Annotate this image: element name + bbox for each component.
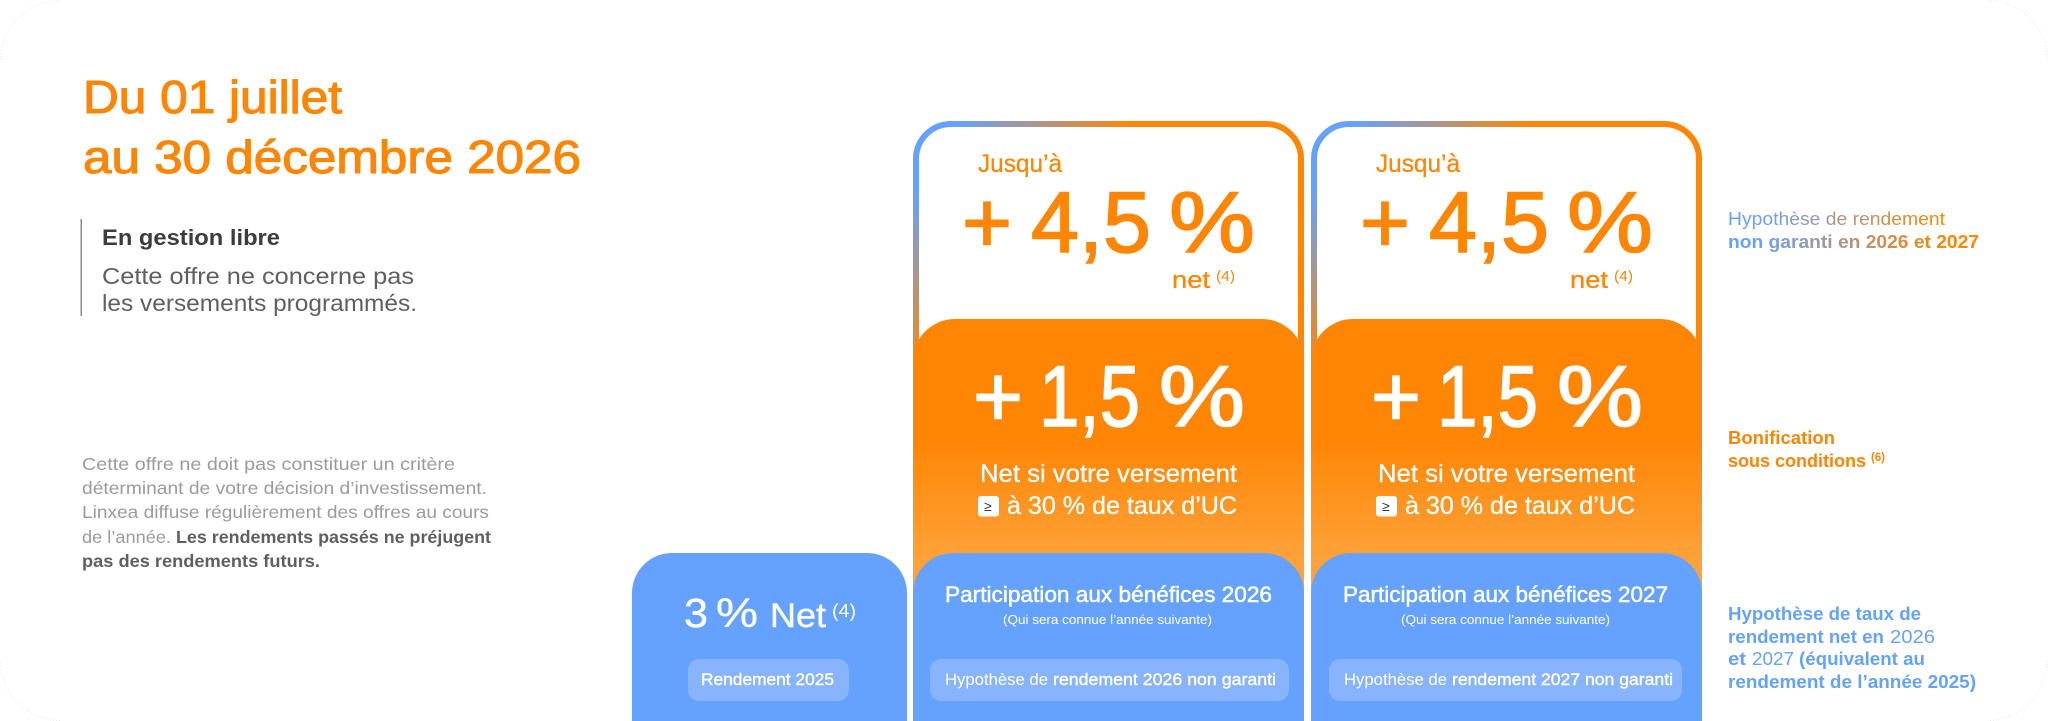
pill: rendement 2025	[688, 659, 849, 701]
label: hypothese de rendement non garanti: Hypothèse de rendement	[1728, 208, 1945, 229]
text block: disclaimer: de l’année.	[82, 527, 171, 547]
label: bonification sous conditions	[1728, 427, 1885, 471]
icon: superieur ou egal: ≥	[984, 498, 992, 514]
value: +4,5 %: 4,5	[1031, 175, 1151, 271]
label: hypothese de taux de rendement: Hypothèse de taux de	[1728, 603, 1921, 624]
value: +1,5 %: 1,5	[1039, 349, 1140, 445]
label: hypothese de rendement non garanti	[1728, 208, 1979, 252]
block: bonification	[1311, 319, 1702, 721]
block: bonification	[913, 319, 1304, 721]
value: +4,5 %: 4,5	[1429, 175, 1549, 271]
value: +4,5 %: +	[962, 175, 1012, 271]
label: hypothese de taux de rendement: et	[1728, 648, 1746, 669]
pill: hypothese 2027	[1329, 659, 1682, 701]
icon: superieur ou egal	[978, 496, 999, 516]
label: net (4): net	[1172, 267, 1210, 294]
value: +1,5 %: %	[1557, 349, 1643, 445]
label: jusqu'a: Jusqu’à	[978, 150, 1062, 178]
label: hypothese de taux de rendement: 2026	[1890, 626, 1935, 647]
label: bonification sous conditions: Bonification	[1728, 427, 1835, 448]
pill: rendement 2025: Rendement 2025	[701, 670, 834, 689]
icon: superieur ou egal: ≥	[1382, 498, 1390, 514]
value: +4,5 %: +	[1360, 175, 1410, 271]
text block: en gestion libre: les versements programmés.	[102, 290, 417, 316]
label: hypothese de taux de rendement: (équivalent au	[1799, 648, 1925, 669]
label: bonification sous conditions: sous conditions	[1728, 450, 1866, 471]
text: net si votre versement: Net si votre versement	[980, 460, 1237, 488]
text block: en gestion libre	[80, 219, 417, 316]
value: +1,5 %: +	[973, 349, 1023, 445]
label: bonification sous conditions: (6)	[1871, 450, 1885, 464]
label: net (4)	[1570, 267, 1633, 294]
value: +4,5 %	[962, 175, 1255, 271]
title	[83, 71, 581, 183]
label: hypothese de taux de rendement	[1728, 603, 1976, 692]
block: participation aux benefices	[1311, 553, 1702, 721]
frame: hypothese de rendement	[1314, 124, 1699, 365]
label: hypothese de taux de rendement: 2027	[1752, 648, 1794, 669]
value: +4,5 %: %	[1567, 175, 1653, 271]
label: net (4): (4)	[1614, 268, 1633, 285]
text: net si votre versement: Net si votre versement	[1378, 460, 1635, 488]
value: +4,5 %	[1360, 175, 1653, 271]
text block: disclaimer: pas des rendements futurs.	[82, 551, 320, 571]
title: au 30 décembre 2026	[83, 131, 581, 183]
value: 3 % net: %	[716, 590, 758, 636]
text block: disclaimer: Les rendements passés ne préjugent	[176, 527, 491, 547]
label: net (4)	[1172, 267, 1235, 294]
icon: superieur ou egal	[1376, 496, 1397, 516]
pill: hypothese 2026	[930, 659, 1289, 701]
label: net (4): net	[1570, 267, 1608, 294]
note: qui sera connue: (Qui sera connue l’année suivante)	[1401, 612, 1610, 627]
pill: hypothese 2026: rendement 2026 non garanti	[1053, 670, 1276, 689]
label: hypothese de taux de rendement: rendement net en	[1728, 626, 1884, 647]
text block: disclaimer	[82, 454, 491, 571]
value: +1,5 %: +	[1371, 349, 1421, 445]
text block: en gestion libre: Cette offre ne concerne pas	[102, 263, 414, 289]
pill: hypothese 2027: Hypothèse de	[1344, 670, 1447, 689]
heading: participation 2027: Participation aux bénéfices 2027	[1343, 582, 1668, 607]
text block: disclaimer: déterminant de votre décision d’investissement.	[82, 478, 487, 498]
panel: colonne 2027	[1311, 124, 1702, 721]
label: jusqu'a: Jusqu’à	[1376, 150, 1460, 178]
value: 3 % net	[684, 590, 856, 636]
text block: disclaimer: Linxea diffuse régulièrement des offres au cours	[82, 502, 489, 522]
value: +1,5 %	[973, 349, 1245, 445]
pill: hypothese 2027: rendement 2027 non garanti	[1452, 670, 1673, 689]
value: +1,5 %	[1371, 349, 1643, 445]
value: 3 % net: 3	[684, 590, 708, 636]
value: 3 % net: (4)	[832, 601, 856, 621]
panel: colonne 2026	[913, 124, 1304, 721]
label: hypothese de rendement non garanti: non garanti en 2026 et 2027	[1728, 231, 1979, 252]
label: hypothese de taux de rendement: rendement de l’année 2025)	[1728, 671, 1976, 692]
frame: hypothese de rendement	[916, 124, 1301, 365]
text: a 30 % de taux d'UC: à 30 % de taux d’UC	[1007, 492, 1237, 520]
text block: en gestion libre: En gestion libre	[102, 225, 280, 250]
value: +1,5 %: %	[1159, 349, 1245, 445]
text block: disclaimer: Cette offre ne doit pas constituer un critère	[82, 454, 455, 474]
note: qui sera connue: (Qui sera connue l’année suivante)	[1003, 612, 1212, 627]
value: 3 % net: Net	[770, 597, 827, 635]
value: +4,5 %: %	[1169, 175, 1255, 271]
pill: hypothese 2026: Hypothèse de	[945, 670, 1048, 689]
value: +1,5 %: 1,5	[1437, 349, 1538, 445]
block: participation aux benefices	[913, 553, 1304, 721]
panel: rendement 2025	[632, 553, 907, 721]
label: net (4): (4)	[1216, 268, 1235, 285]
heading: participation 2026: Participation aux bénéfices 2026	[945, 582, 1272, 607]
title: Du 01 juillet	[83, 71, 342, 123]
text: a 30 % de taux d'UC: à 30 % de taux d’UC	[1405, 492, 1635, 520]
